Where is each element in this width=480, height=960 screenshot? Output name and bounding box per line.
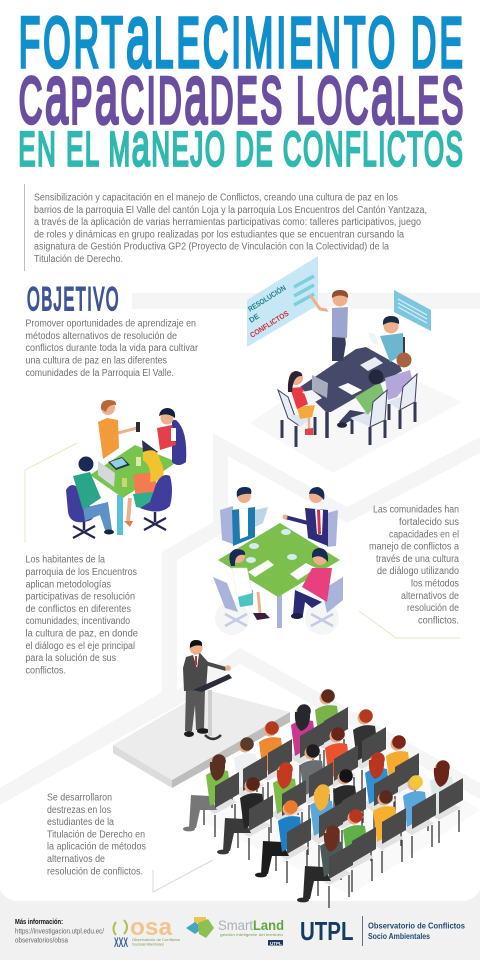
illustration: meeting with presenter — [246, 256, 431, 447]
text: los habitantes: comunidades, incentivando — [26, 616, 130, 627]
text: las comunidades: través de una cultura — [376, 554, 459, 565]
decorative gold corner line left — [25, 443, 77, 543]
intro text block: de roles y dinámicas en grupo realizadas por los estudiantes que se encuentran cursando la — [34, 229, 404, 240]
text: los habitantes: parroquia de los Encuentros — [26, 567, 137, 578]
person blue shirt — [368, 316, 405, 362]
intro text block — [24, 184, 427, 271]
logo: smartland: Land — [253, 917, 284, 933]
woman with yellow hair on purple chair — [124, 450, 172, 530]
man in teal on purple chair — [66, 456, 114, 538]
projected screen — [246, 256, 318, 347]
intro text block: a través de la aplicación de varias herramientas participativas como: talleres participativos, juego — [34, 217, 421, 228]
text: las comunidades: conflictos. — [418, 615, 459, 626]
illustration: seated audience — [183, 689, 463, 908]
intro text block: Sensibilización y capacitación en el manejo de Conflictos, creando una cultura de paz en los — [34, 192, 398, 204]
text: los habitantes: el diálogo es el eje principal — [26, 641, 135, 652]
man pink shirt — [291, 548, 343, 619]
objetivo text: métodos alternativos de resolución de — [26, 331, 177, 342]
logo: smartland: gestión inteligente del territorio — [220, 933, 283, 937]
logo: obsa — [114, 914, 180, 950]
text: los habitantes — [26, 554, 138, 676]
person lavender shirt with chair — [385, 352, 417, 429]
objetivo text: Promover oportunidades de aprendizaje en — [26, 318, 196, 330]
footer — [15, 914, 465, 950]
logo: utpl: Observatorio de Conflictos — [368, 920, 465, 930]
text: se desarrollaron: la aplicación de métodos — [47, 842, 146, 853]
text: se desarrollaron: Titulación de Derecho en — [47, 829, 145, 840]
text: los habitantes: para la solución de sus — [26, 653, 116, 664]
objetivo text: una cultura de paz en las diferentes — [26, 356, 167, 366]
logo: smartland — [186, 917, 284, 946]
stage — [113, 690, 290, 788]
man navy jacket — [282, 487, 338, 547]
intro text block: asignatura de Gestión Productiva GP2 (Proyecto de Vinculación con la Colectividad) de la — [34, 242, 389, 253]
illustration: stage and speaker — [113, 640, 290, 788]
text: las comunidades: de diálogo utilizando — [377, 566, 459, 577]
background hexagon bands — [0, 293, 480, 895]
illustration: four people at a square table — [213, 487, 343, 635]
man in orange with phone — [98, 400, 140, 459]
person red shirt with chair and laptop — [278, 371, 328, 447]
logo: obsa: XXX — [114, 934, 128, 950]
logo: obsa: osa — [130, 914, 173, 941]
person green shirt with chair — [337, 370, 387, 445]
table — [300, 347, 402, 438]
more information: https://investigacion.utpl.edu.ec/ — [15, 926, 105, 936]
text: los habitantes: conflictos. — [26, 665, 66, 676]
text: se desarrollaron: Se desarrollaron — [47, 792, 112, 804]
objetivo text: comunidades de la Parroquia El Valle. — [26, 368, 174, 379]
text: se desarrollaron: destrezas en los — [47, 805, 111, 816]
text: los habitantes: aplican metodologías — [26, 579, 111, 590]
text: se desarrollaron — [47, 792, 146, 878]
text: las comunidades: capacidades en el — [389, 529, 459, 540]
text: los habitantes: Los habitantes de la — [26, 554, 105, 566]
decorative gold corner line right — [359, 611, 460, 638]
text: se desarrollaron: estudiantes de la — [47, 817, 114, 828]
projected screen: RESOLUCIÓN — [246, 283, 288, 314]
objetivo text: conflictos durante toda la vida para cultivar — [26, 343, 199, 354]
title — [18, 0, 466, 179]
text: se desarrollaron: alternativos de — [47, 854, 105, 865]
table — [218, 523, 340, 628]
more information: Más información: — [15, 919, 63, 926]
more information — [15, 919, 105, 944]
presenter — [310, 290, 352, 361]
tablet and laptops — [98, 440, 158, 487]
projected screen: DE — [247, 312, 261, 325]
text: los habitantes: de conflictos en diferentes — [26, 604, 131, 615]
projected screen: CONFLICTOS — [248, 309, 290, 340]
text: las comunidades: los métodos — [411, 578, 459, 590]
logo: smartland: Smart — [218, 917, 253, 933]
logo: smartland: UTPL — [270, 941, 282, 946]
woman white shirt — [213, 549, 270, 620]
text: se desarrollaron: resolución de conflictos. — [47, 866, 143, 878]
chair bases — [215, 601, 339, 635]
text: las comunidades: manejo de conflictos a — [369, 542, 459, 553]
woman in red — [157, 408, 186, 465]
logo: obsa: Socioambientales — [132, 942, 164, 946]
text: las comunidades: Las comunidades han — [373, 504, 459, 516]
decorative gray corner line — [153, 860, 213, 892]
text: las comunidades: alternativos de — [401, 591, 459, 602]
intro text block: Titulación de Derecho. — [34, 254, 123, 265]
intro text block: barrios de la parroquia El Valle del cantón Loja y la parroquia Los Encuentros del Cantón Yantzaza, — [34, 205, 427, 216]
text: los habitantes: participativas de resolución — [26, 592, 135, 603]
more information: observatorios/obsa — [15, 936, 69, 944]
speaker — [183, 640, 232, 739]
logo: utpl: Socio Ambientales — [368, 931, 430, 941]
logo: utpl — [300, 916, 465, 946]
illustration: group around a green table — [66, 400, 186, 538]
table — [90, 445, 177, 535]
man blue jacket — [220, 487, 268, 546]
text: las comunidades: resolución de — [407, 603, 459, 614]
logo: obsa: Observatorio de Conflictos — [132, 938, 180, 942]
text: las comunidades: fortalecido sus — [399, 517, 459, 528]
speech bubble panel — [394, 290, 431, 331]
text: los habitantes: la cultura de paz, en donde — [26, 628, 138, 640]
heading: objetivo: OBJETIVO — [27, 281, 120, 317]
objetivo text — [26, 318, 199, 379]
text: las comunidades — [369, 504, 459, 626]
logo: utpl: UTPL — [300, 916, 354, 946]
